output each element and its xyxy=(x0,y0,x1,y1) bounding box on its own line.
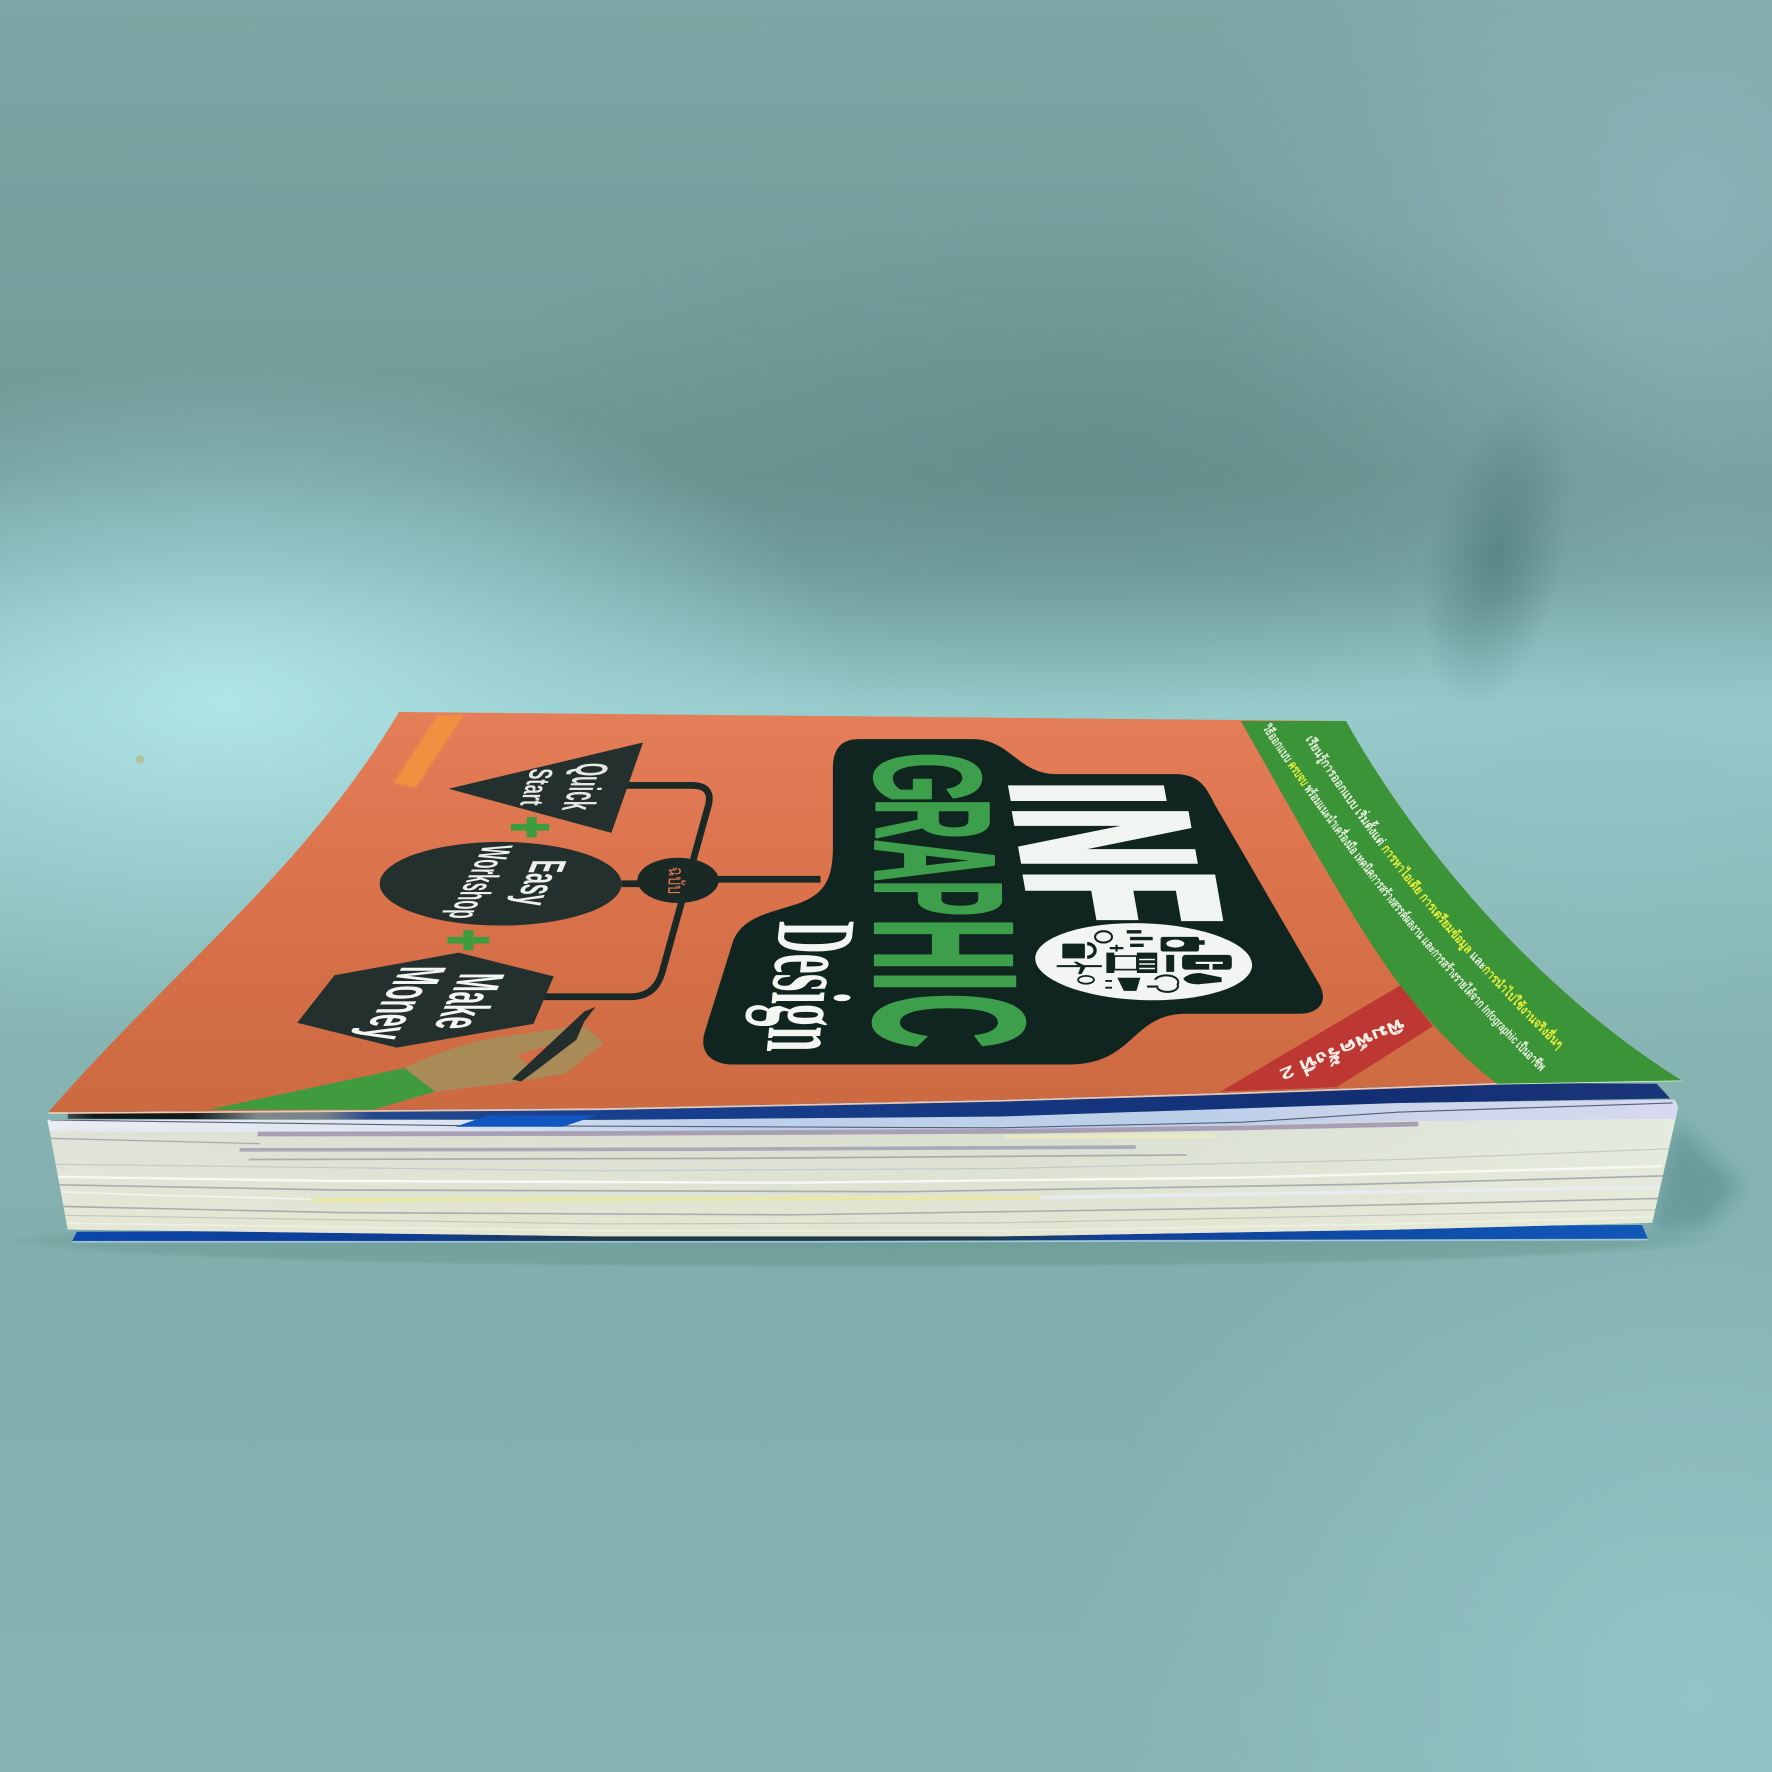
icon: cloud xyxy=(1147,975,1178,992)
icon: cup xyxy=(1105,979,1139,990)
node: Make Money xyxy=(297,953,554,1048)
title block xyxy=(703,739,1323,1065)
INF: N xyxy=(965,808,1243,867)
plus xyxy=(511,817,549,837)
INF: I xyxy=(968,782,1208,804)
icon: hand xyxy=(1183,973,1222,984)
cover xyxy=(48,712,1682,1114)
book shadow right side xyxy=(1648,1119,1743,1236)
icon: document xyxy=(1062,944,1095,958)
illustration: hand with pen xyxy=(208,1007,603,1110)
icon badge xyxy=(1034,920,1253,1004)
GRAPHIC: C xyxy=(831,993,1068,1048)
gap under cover xyxy=(68,1083,1670,1120)
node: Easy Workshop xyxy=(380,842,622,926)
node: Easy Workshop: Workshop xyxy=(439,845,522,919)
blurb line 2: วิธีออกแบบ ครบจบ พร้อมแนะนำเครื่องมือ เทคนิคการสร้างสรรค์ผลงาน และการสร้างรายได้จาก Infographic เป็นอาชีพ xyxy=(1264,722,1546,1072)
node: Quick Start: Start xyxy=(512,768,561,806)
blue page tab xyxy=(455,1115,597,1127)
back cover edge xyxy=(72,1225,1648,1242)
INF: F xyxy=(972,871,1273,922)
node: Easy Workshop: Easy xyxy=(504,860,578,906)
icon: bars xyxy=(1127,930,1153,947)
blurb line 1: เรียนรู้การออกแบบ เริ่มตั้งแต่ การหาไอเดีย การเตรียมข้อมูล และการนำไปใช้งานจริงอื่นๆ xyxy=(1306,736,1562,1051)
icon: plane xyxy=(1057,962,1102,974)
GRAPHIC: R xyxy=(842,799,1023,839)
node: Quick Start: Quick xyxy=(551,763,618,811)
red edition banner xyxy=(1221,985,1433,1092)
edition text: พิมพ์ครั้งที่ 2 xyxy=(1277,1015,1408,1087)
node: Quick Start xyxy=(449,742,643,833)
GRAPHIC: P xyxy=(836,880,1039,916)
node: Make Money: Make xyxy=(419,973,518,1029)
node: ฉบับ: ฉบับ xyxy=(663,867,688,894)
icon: clock xyxy=(1095,931,1112,943)
dust speck xyxy=(136,755,145,764)
plus xyxy=(448,930,489,950)
icon: camera xyxy=(1161,937,1205,952)
GRAPHIC: A xyxy=(840,840,1030,881)
connector lines xyxy=(542,785,820,997)
GRAPHIC: G xyxy=(843,753,1012,803)
publisher label xyxy=(393,715,463,788)
icon: facebook xyxy=(1182,955,1232,970)
node: ฉบับ xyxy=(637,858,719,903)
green band with blurb xyxy=(1240,721,1682,1084)
icon: shop xyxy=(1106,953,1174,973)
GRAPHIC: H xyxy=(833,918,1052,970)
icon: plus xyxy=(1110,945,1123,952)
GRAPHIC: I xyxy=(832,971,1057,991)
node: Make Money: Money xyxy=(345,966,461,1040)
page block xyxy=(34,1100,1684,1243)
INF xyxy=(965,782,1273,922)
GRAPHIC xyxy=(831,753,1068,1048)
icon: sun xyxy=(1078,976,1094,984)
Design: Design xyxy=(742,921,881,1052)
